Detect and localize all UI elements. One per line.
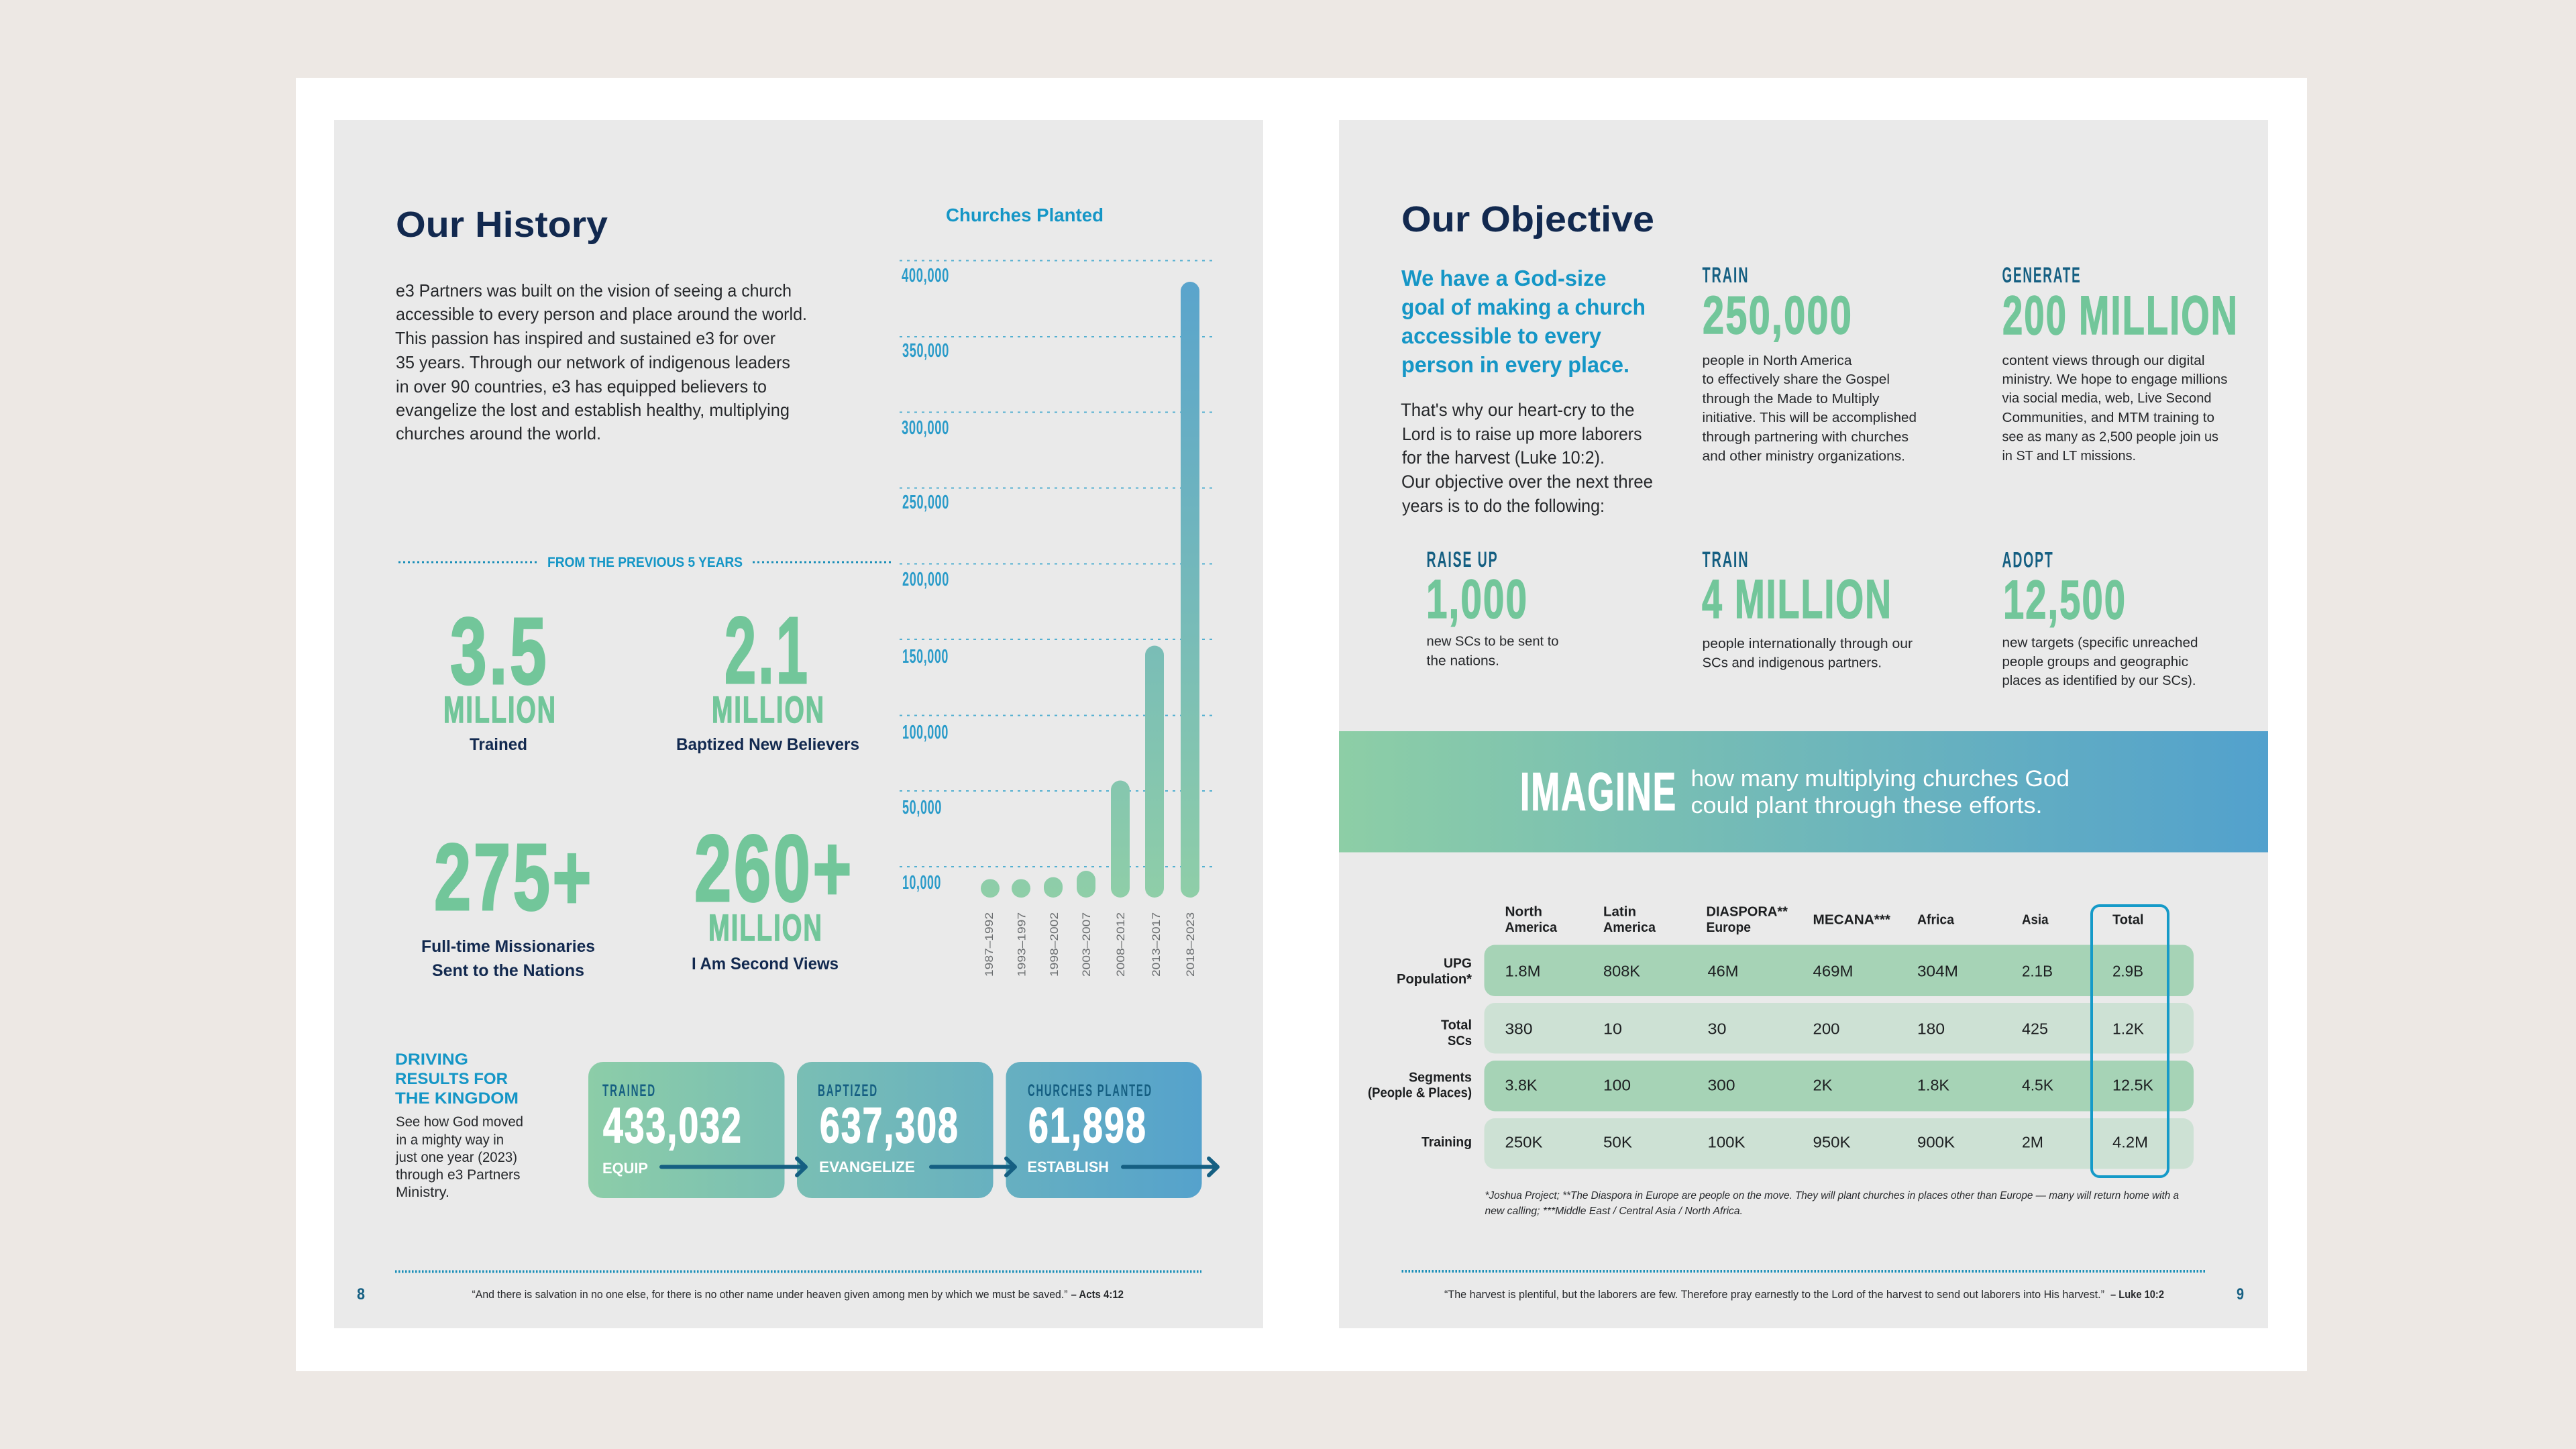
text block: history intro: churches around the world.: [396, 423, 601, 443]
section label: from the previous 5 years: FROM THE PREVIOUS 5 YEARS: [547, 554, 743, 570]
row: UPG population: 304M: [1917, 962, 1958, 979]
card: baptized / evangelize: 637,308: [820, 1097, 959, 1153]
text block: driving results: [395, 1051, 523, 1200]
chart title: Churches Planted: [946, 205, 1104, 225]
bars: [981, 282, 1199, 898]
stat: 275+ missionaries: Full-time Missionaries: [421, 937, 595, 956]
panel: Our Objective page: [1339, 120, 2268, 1328]
objective: generate 200 million: GENERATE: [2002, 263, 2081, 287]
y axis labels: 350,000: [902, 340, 949, 362]
y axis labels: 200,000: [902, 569, 949, 590]
row: total SCs: 200: [1813, 1020, 1839, 1037]
objective: generate 200 million: see as many as 2,500 people join us: [2002, 429, 2218, 444]
objective: adopt 12,500: new targets (specific unreached: [2002, 635, 2198, 651]
stat: 3.5 million trained: MILLION: [443, 688, 557, 731]
card: baptized / evangelize: BAPTIZED: [818, 1081, 878, 1100]
x axis year labels: [983, 912, 1197, 977]
objective: train 250,000: initiative. This will be accomplished: [1703, 410, 1917, 425]
row: total SCs: 30: [1708, 1020, 1727, 1037]
objective: raise up 1,000: RAISE UP: [1426, 547, 1499, 572]
objective: generate 200 million: Communities, and MTM training to: [2002, 410, 2214, 425]
text block: driving results: through e3 Partners: [396, 1167, 521, 1183]
table: regional targets: [1368, 904, 2194, 1177]
x axis year labels: 2013–2017: [1150, 912, 1163, 977]
footnote: [1485, 1190, 2179, 1217]
objective: generate 200 million: via social media, web, Live Second: [2002, 390, 2211, 406]
card: trained / equip: TRAINED: [602, 1081, 656, 1100]
objective: train 4 million: 4 MILLION: [1702, 569, 1892, 630]
column headers: Total: [2112, 912, 2144, 927]
footnote: new calling; ***Middle East / Central Asia / North Africa.: [1485, 1205, 1743, 1217]
row: segments: 2K: [1813, 1076, 1833, 1093]
y axis labels: 50,000: [902, 797, 942, 818]
text block: driving results: RESULTS FOR: [395, 1070, 508, 1088]
y axis labels: 150,000: [902, 646, 949, 667]
row headers: (People & Places): [1368, 1085, 1472, 1100]
objective: adopt 12,500: places as identified by our SCs).: [2002, 673, 2196, 688]
text block: God-size goal: [1401, 266, 1646, 377]
column headers: DIASPORA**: [1707, 904, 1788, 919]
objective: train 250,000: 250,000: [1703, 285, 1853, 345]
row headers: Total: [1441, 1018, 1472, 1033]
row: segments: 4.5K: [2022, 1076, 2054, 1093]
x axis year labels: 1993–1997: [1016, 912, 1028, 977]
text block: objective intro: That's why our heart-cry to the: [1401, 400, 1634, 420]
arrow: establish onward: [1123, 1159, 1218, 1175]
row: total SCs: 180: [1917, 1020, 1945, 1037]
y axis labels: 10,000: [902, 872, 941, 894]
text block: God-size goal: goal of making a church: [1401, 294, 1646, 319]
objective: train 250,000: TRAIN: [1703, 263, 1750, 287]
column headers: North: [1505, 904, 1542, 919]
text block: objective intro: [1401, 400, 1653, 516]
row: training: 250K: [1505, 1134, 1543, 1151]
row: UPG population: 2.9B: [2112, 962, 2143, 979]
footnote: *Joshua Project; **The Diaspora in Europe are people on the move. They will plant churches in places other than Europe — many will return home with a: [1485, 1190, 2179, 1201]
objective: raise up 1,000: new SCs to be sent to: [1426, 633, 1559, 649]
stat: 2.1 million baptized: MILLION: [712, 688, 825, 731]
stat: 2.1 million baptized: Baptized New Believers: [676, 735, 859, 754]
stat: 260+ million views: [692, 815, 854, 973]
text block: history intro: [395, 280, 807, 443]
row: UPG population: 46M: [1708, 962, 1739, 979]
objective: train 250,000: [1703, 263, 1917, 464]
row: segments: 3.8K: [1505, 1076, 1538, 1093]
row headers: UPG: [1444, 957, 1472, 971]
text block: objective intro: Lord is to raise up more laborers: [1402, 424, 1642, 444]
text block: history intro: in over 90 countries, e3 has equipped believers to: [396, 376, 767, 396]
column headers: Africa: [1917, 912, 1955, 927]
banner: imagine: how many multiplying churches God: [1690, 766, 2070, 792]
stat: 2.1 million baptized: [676, 597, 859, 754]
row headers: Population*: [1397, 972, 1472, 987]
objective: adopt 12,500: [2002, 547, 2198, 688]
stat: 260+ million views: 260+: [694, 815, 854, 921]
row: segments: 12.5K: [2112, 1076, 2154, 1093]
row: segments: 300: [1708, 1076, 1735, 1093]
card: trained / equip: 433,032: [603, 1097, 743, 1153]
card: churches planted / establish: 61,898: [1028, 1097, 1147, 1153]
column headers: Latin: [1603, 904, 1636, 919]
text block: God-size goal: person in every place.: [1401, 352, 1629, 377]
stat: 275+ missionaries: Sent to the Nations: [432, 961, 584, 980]
text block: history intro: 35 years. Through our network of indigenous leaders: [396, 352, 790, 372]
objective: train 250,000: through the Made to Multiply: [1703, 391, 1880, 407]
objective: train 250,000: through partnering with churches: [1703, 429, 1909, 445]
column headers: America: [1603, 920, 1656, 935]
y axis labels: [902, 265, 949, 894]
stat: 3.5 million trained: Trained: [470, 735, 527, 754]
card: churches planted / establish: ESTABLISH: [1028, 1159, 1109, 1175]
text block: driving results: THE KINGDOM: [395, 1089, 519, 1108]
footer quote: Luke 10:2: “The harvest is plentiful, but the laborers are few. Therefore pray earnestly to the Lord of the harvest to send out laborers into His harvest.”: [1444, 1289, 2104, 1301]
footer quote: Luke 10:2: – Luke 10:2: [2110, 1289, 2164, 1301]
text block: history intro: This passion has inspired and sustained e3 for over: [395, 328, 775, 348]
objective: train 4 million: people internationally through our: [1703, 636, 1913, 651]
stat: 260+ million views: MILLION: [708, 906, 823, 949]
stat: 275+ missionaries: [421, 824, 595, 980]
x axis year labels: 2008–2012: [1114, 912, 1127, 977]
text block: history intro: accessible to every person and place around the world.: [396, 304, 807, 324]
chart: Churches Planted bar chart: [900, 205, 1215, 977]
row: UPG population: 808K: [1603, 962, 1641, 979]
stat: 3.5 million trained: [443, 598, 557, 754]
text block: objective intro: Our objective over the next three: [1401, 472, 1653, 492]
card: churches planted / establish: CHURCHES PLANTED: [1028, 1081, 1152, 1100]
row headers: SCs: [1448, 1034, 1472, 1049]
row: training: 2M: [2022, 1134, 2043, 1151]
row: total SCs: [1505, 1020, 2145, 1037]
objective: adopt 12,500: 12,500: [2003, 570, 2127, 631]
text block: driving results: See how God moved: [396, 1114, 523, 1130]
objective: generate 200 million: content views through our digital: [2002, 353, 2204, 368]
row: training: [1505, 1134, 2148, 1151]
row: segments: 100: [1603, 1076, 1631, 1093]
row: total SCs: 425: [2022, 1020, 2048, 1037]
row: training: 4.2M: [2112, 1134, 2148, 1151]
card: baptized / evangelize: [797, 1062, 993, 1198]
text block: driving results: DRIVING: [395, 1051, 468, 1069]
objective: adopt 12,500: people groups and geographic: [2002, 654, 2188, 669]
column headers: America: [1505, 920, 1558, 935]
objective: generate 200 million: [2002, 263, 2239, 464]
column headers: Asia: [2022, 912, 2049, 927]
row: total SCs: 10: [1603, 1020, 1622, 1037]
row: segments: 1.8K: [1917, 1076, 1950, 1093]
text block: God-size goal: accessible to every: [1401, 323, 1602, 348]
card: trained / equip: EQUIP: [602, 1160, 648, 1177]
objective: raise up 1,000: 1,000: [1426, 569, 1528, 630]
column headers: MECANA***: [1813, 912, 1890, 927]
stat: 260+ million views: I Am Second Views: [692, 955, 839, 973]
text block: history intro: e3 Partners was built on the vision of seeing a church: [396, 280, 792, 301]
footer quote: Acts 4:12: – Acts 4:12: [1071, 1289, 1124, 1301]
banner: imagine: could plant through these efforts.: [1690, 793, 2042, 818]
objective: train 4 million: [1702, 547, 1913, 671]
text block: history intro: evangelize the lost and establish healthy, multiplying: [396, 400, 790, 420]
x axis year labels: 1998–2002: [1048, 912, 1061, 977]
objective: raise up 1,000: [1426, 547, 1559, 668]
banner: imagine: IMAGINE: [1520, 762, 1677, 821]
y axis labels: 300,000: [902, 417, 949, 439]
y axis labels: 400,000: [902, 265, 949, 286]
text block: driving results: in a mighty way in: [396, 1132, 504, 1148]
row headers: Training: [1421, 1135, 1472, 1150]
card: trained / equip: [588, 1062, 785, 1198]
row: UPG population: [1505, 962, 2143, 979]
text block: driving results: just one year (2023): [395, 1150, 517, 1165]
row headers: [1368, 957, 1472, 1150]
objective: adopt 12,500: ADOPT: [2002, 547, 2054, 572]
arrow: evangelize to establish: [931, 1159, 1015, 1175]
objective: generate 200 million: ministry. We hope to engage millions: [2002, 372, 2227, 387]
objective: generate 200 million: 200 MILLION: [2002, 285, 2239, 346]
title: Our Objective: Our Objective: [1401, 199, 1654, 239]
objective: train 250,000: to effectively share the Gospel: [1703, 372, 1890, 387]
row: UPG population: 469M: [1813, 962, 1853, 979]
objective: generate 200 million: in ST and LT missions.: [2002, 448, 2136, 464]
row: total SCs: 1.2K: [2112, 1020, 2145, 1037]
row headers: Segments: [1409, 1071, 1472, 1085]
row: segments: [1505, 1076, 2154, 1093]
objective: train 4 million: TRAIN: [1703, 547, 1750, 572]
objective: raise up 1,000: the nations.: [1426, 653, 1499, 668]
row: UPG population: 1.8M: [1505, 962, 1540, 979]
panel: Our History page: [334, 120, 1263, 1328]
y axis labels: 100,000: [902, 722, 949, 743]
title: Our History: Our History: [396, 205, 608, 245]
x axis year labels: 1987–1992: [983, 912, 996, 977]
page number 9: 9: [2237, 1285, 2244, 1303]
x axis year labels: 2018–2023: [1184, 912, 1197, 977]
row: training: 50K: [1603, 1134, 1633, 1151]
row backgrounds: [1484, 945, 2194, 1169]
objective: train 250,000: people in North America: [1703, 353, 1852, 368]
row: training: 900K: [1917, 1134, 1955, 1151]
card: churches planted / establish: [1006, 1062, 1202, 1198]
arrow: equip to evangelize: [661, 1159, 806, 1175]
y axis labels: 250,000: [902, 492, 949, 513]
x axis year labels: 2003–2007: [1080, 912, 1093, 977]
stat: 2.1 million baptized: 2.1: [724, 597, 810, 703]
footer quote: Acts 4:12: “And there is salvation in no one else, for there is no other name under heaven given among men by which we must be saved.”: [472, 1289, 1068, 1301]
objective: train 4 million: SCs and indigenous partners.: [1703, 655, 1882, 671]
text block: objective intro: years is to do the following:: [1402, 496, 1605, 516]
text block: objective intro: for the harvest (Luke 10:2).: [1402, 447, 1605, 468]
text block: driving results: Ministry.: [396, 1185, 449, 1200]
column headers: Europe: [1707, 920, 1751, 935]
text block: God-size goal: We have a God-size: [1401, 266, 1606, 290]
objective: train 250,000: and other ministry organizations.: [1703, 448, 1905, 464]
row: total SCs: 380: [1505, 1020, 1532, 1037]
row: training: 950K: [1813, 1134, 1851, 1151]
stat: 275+ missionaries: 275+: [434, 824, 594, 930]
page number 8: 8: [357, 1285, 365, 1303]
stat: 3.5 million trained: 3.5: [450, 598, 549, 704]
row: UPG population: 2.1B: [2022, 962, 2053, 979]
highlight: total column outline: [2092, 906, 2168, 1177]
banner: imagine: [1339, 731, 2268, 852]
row: training: 100K: [1708, 1134, 1746, 1151]
column headers: [1505, 904, 2144, 935]
card: baptized / evangelize: EVANGELIZE: [819, 1159, 915, 1175]
